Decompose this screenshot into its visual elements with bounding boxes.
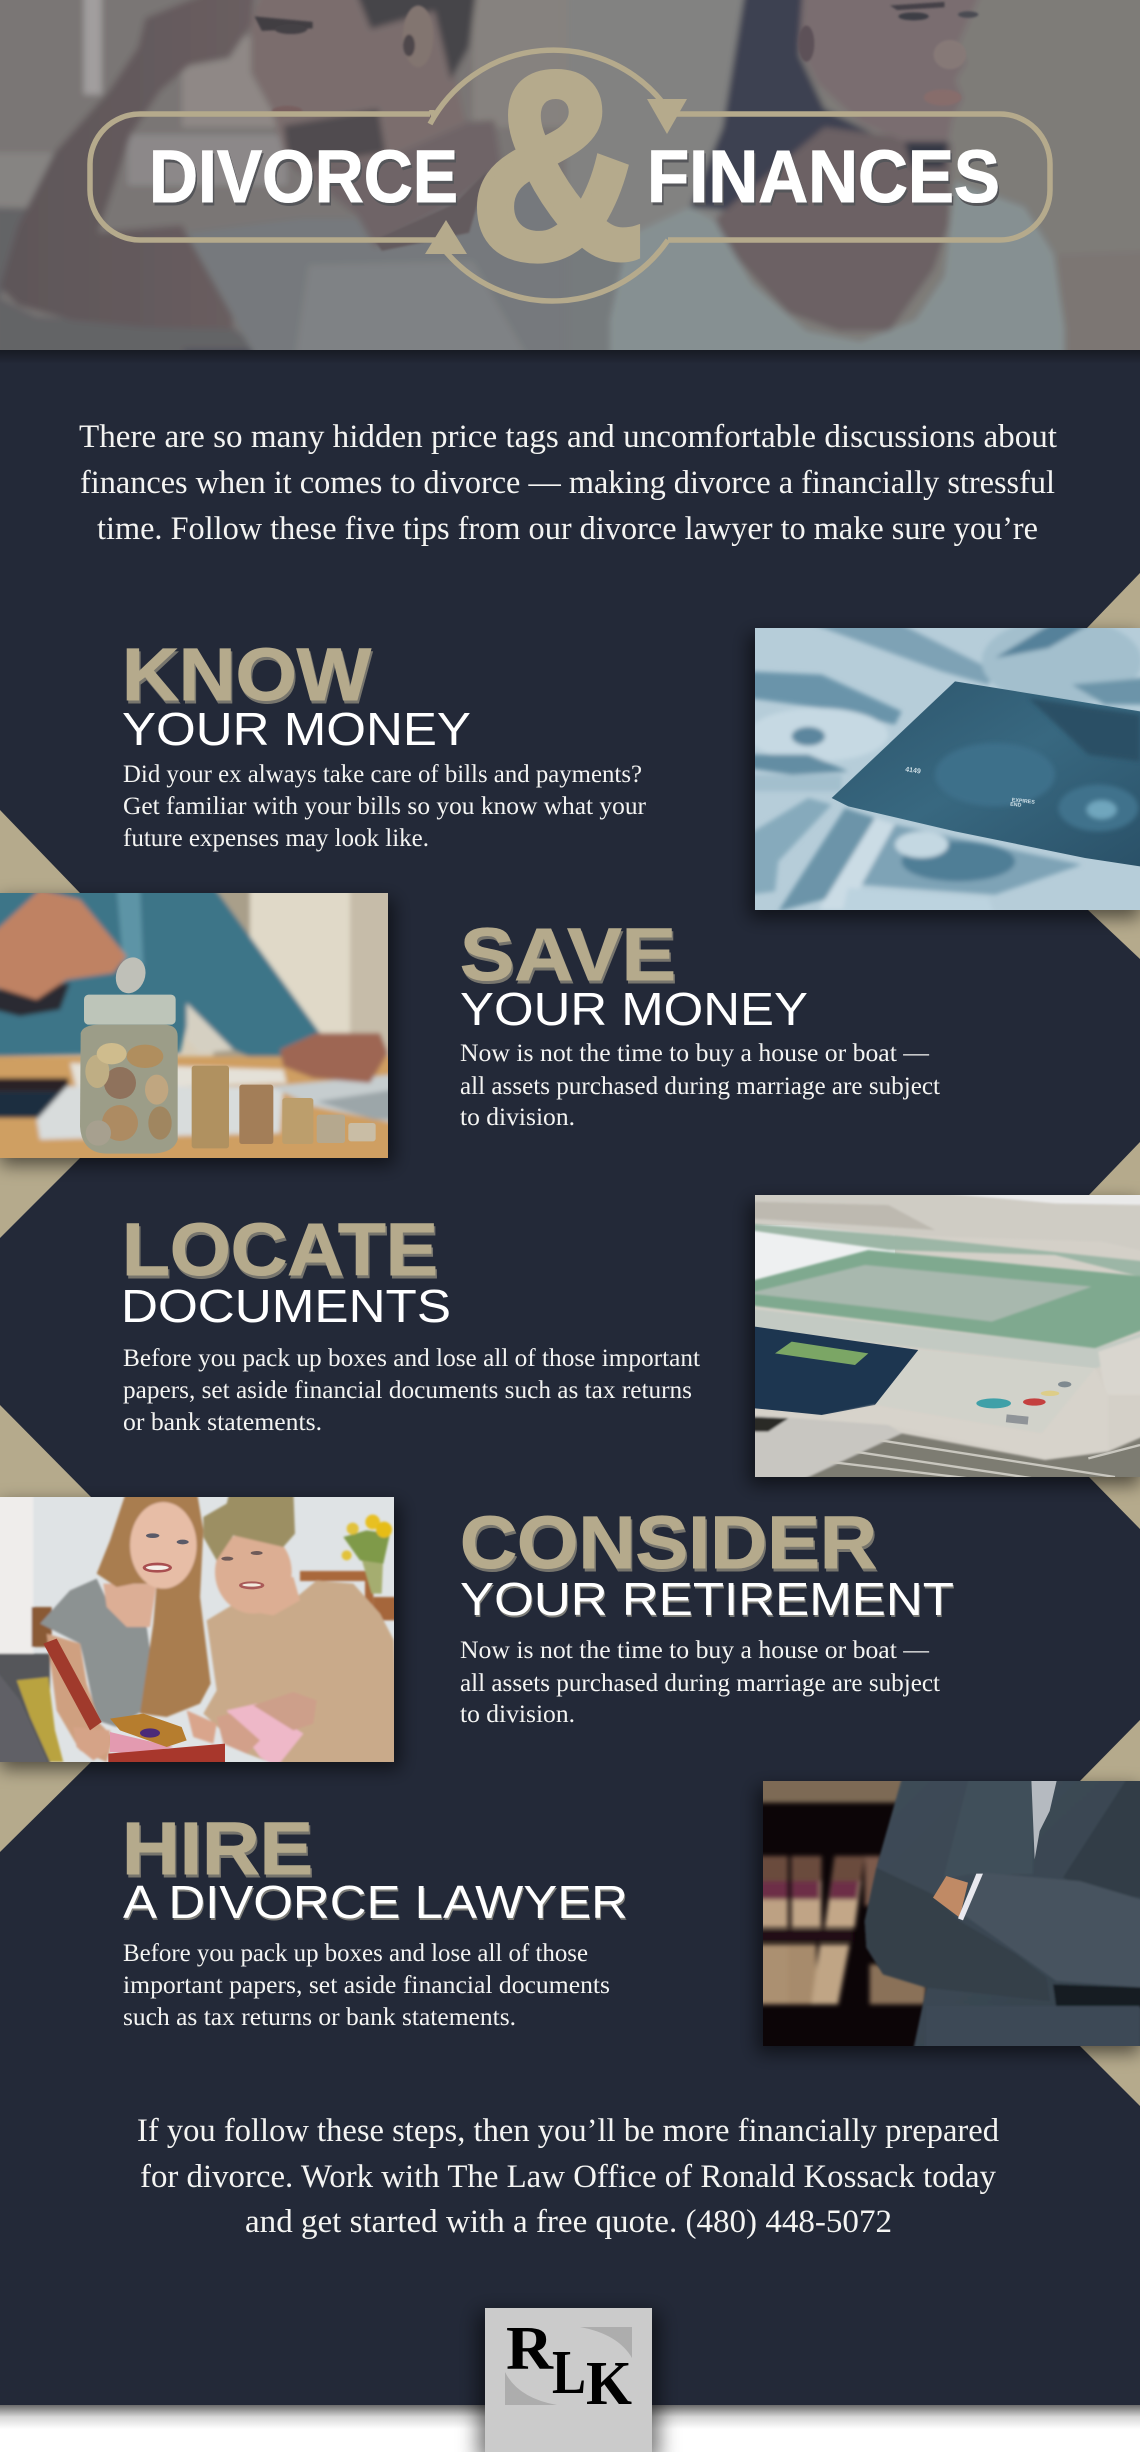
body: locate documents: papers, set aside financial documents such as tax returns bbox=[123, 1377, 692, 1404]
photo: lawyer with crossed arms bbox=[763, 1781, 1140, 2046]
coin stacks bbox=[192, 1066, 376, 1148]
heading: locate documents bbox=[121, 1208, 451, 1332]
logo shadow bbox=[478, 2312, 659, 2452]
body: save your money: all assets purchased during marriage are subject bbox=[460, 1073, 940, 1100]
body: consider your retirement: to division. bbox=[460, 1701, 575, 1728]
heading: hire a divorce lawyer: A DIVORCE LAWYER bbox=[123, 1876, 628, 1928]
logo letters bbox=[506, 2315, 632, 2418]
closing paragraph bbox=[137, 2113, 999, 2240]
heading: save your money bbox=[460, 913, 808, 1035]
photo: young and older woman with gift box bbox=[0, 1497, 394, 1762]
closing paragraph: for divorce. Work with The Law Office of Ronald Kossack today bbox=[140, 2159, 996, 2195]
body: know your money: future expenses may look like. bbox=[123, 825, 429, 852]
title word: finances: FINANCES bbox=[647, 135, 1000, 218]
header photo: couple sitting back to back bbox=[0, 0, 1140, 350]
body: save your money: to division. bbox=[460, 1104, 575, 1131]
closing paragraph: If you follow these steps, then you’ll be more financially prepared bbox=[137, 2113, 999, 2149]
photo: coins in jar bbox=[0, 893, 388, 1158]
body: know your money: Did your ex always take care of bills and payments? bbox=[123, 761, 642, 788]
intro paragraph bbox=[79, 419, 1057, 547]
heading: know your money bbox=[122, 633, 471, 755]
heading: hire a divorce lawyer: HIRE bbox=[122, 1807, 313, 1890]
heading: consider your retirement: YOUR RETIREMENT bbox=[460, 1573, 954, 1625]
body: know your money: Get familiar with your bills so you know what your bbox=[123, 793, 647, 820]
card bbox=[832, 681, 1140, 866]
heading: save your money: YOUR MONEY bbox=[460, 983, 808, 1035]
body: hire a divorce lawyer: such as tax returns or bank statements. bbox=[123, 2004, 516, 2031]
body: consider your retirement: Now is not the time to buy a house or boat — bbox=[460, 1637, 930, 1664]
body: locate documents: or bank statements. bbox=[123, 1409, 322, 1436]
heading: know your money: KNOW bbox=[122, 633, 371, 716]
heading: save your money: SAVE bbox=[460, 913, 676, 996]
image shadows bbox=[0, 634, 1140, 2053]
heading: consider your retirement bbox=[460, 1501, 954, 1625]
body: hire a divorce lawyer: Before you pack up boxes and lose all of those bbox=[123, 1940, 588, 1967]
heading: locate documents: LOCATE bbox=[122, 1208, 438, 1291]
frame: rounded banner and circular arrows bbox=[90, 50, 1050, 301]
ampersand: & bbox=[470, 17, 644, 314]
body: consider your retirement: all assets purchased during marriage are subject bbox=[460, 1670, 940, 1697]
body: hire a divorce lawyer bbox=[123, 1940, 610, 2031]
intro paragraph: finances when it comes to divorce — making divorce a financially stressful bbox=[80, 465, 1055, 501]
logo letters: R bbox=[506, 2315, 554, 2383]
gift box bbox=[43, 1639, 225, 1762]
control panel bbox=[755, 1327, 1095, 1433]
title word: divorce: DIVORCE bbox=[149, 135, 458, 218]
body: hire a divorce lawyer: important papers, set aside financial documents bbox=[123, 1972, 610, 1999]
body: locate documents bbox=[123, 1345, 700, 1436]
logo letters: K bbox=[586, 2350, 632, 2418]
body: locate documents: Before you pack up boxes and lose all of those important bbox=[123, 1345, 700, 1372]
body: know your money bbox=[123, 761, 647, 852]
header bottom shadow bbox=[0, 350, 1140, 364]
photo: credit card on dollar bills bbox=[755, 628, 1140, 910]
body: save your money bbox=[460, 1040, 940, 1131]
footer white strip bbox=[0, 2405, 1140, 2452]
photo: copier bbox=[755, 1195, 1140, 1477]
logo corners bbox=[580, 2327, 632, 2358]
title badge with arrows and ampersand bbox=[90, 17, 1050, 314]
heading: know your money: YOUR MONEY bbox=[122, 703, 471, 755]
card: 4149 bbox=[905, 766, 921, 775]
heading: locate documents: DOCUMENTS bbox=[121, 1280, 451, 1332]
heading: consider your retirement: CONSIDER bbox=[460, 1501, 877, 1584]
intro paragraph: There are so many hidden price tags and uncomfortable discussions about bbox=[79, 419, 1057, 455]
body: save your money: Now is not the time to buy a house or boat — bbox=[460, 1040, 930, 1067]
logo letters: L bbox=[552, 2339, 586, 2407]
logo tab bbox=[485, 2308, 652, 2452]
heading: hire a divorce lawyer bbox=[122, 1807, 628, 1928]
tie and shirt bbox=[933, 1779, 1057, 1920]
faces bbox=[143, 1533, 264, 1589]
jar bbox=[80, 995, 178, 1154]
intro paragraph: time. Follow these five tips from our divorce lawyer to make sure you’re bbox=[97, 511, 1038, 547]
card: END bbox=[1010, 802, 1022, 809]
tray stripes bbox=[828, 1440, 1140, 1482]
body: consider your retirement bbox=[460, 1637, 940, 1728]
decorative tan triangles bbox=[0, 573, 1140, 2106]
closing paragraph: and get started with a free quote. (480) 448-5072 bbox=[245, 2204, 892, 2240]
card: EXPIRES bbox=[1011, 797, 1035, 806]
